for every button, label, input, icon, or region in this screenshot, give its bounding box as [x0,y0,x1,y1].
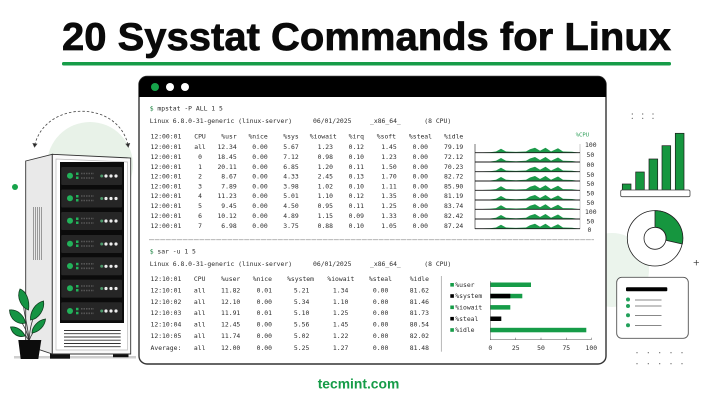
sar output table: 12:10:02 [151,298,181,306]
sar output table: 5.10 [294,309,309,317]
%CPU sparkline chart: 50 [586,180,594,188]
%CPU sparkline chart: 100 [585,141,597,149]
mpstat output table: 1.02 [318,182,333,190]
sar output table: 0.00 [257,344,272,352]
mpstat output table: 0.11 [349,202,364,210]
sar output table: Linux 6.8.0-31-generic (linux-server) [150,260,292,268]
title: 20 Sysstat Commands for Linux [62,16,671,59]
mpstat output table: 0.00 [252,192,268,200]
leaves [10,289,46,337]
sar output table: all [194,344,206,352]
mpstat output table: CPU [194,132,206,140]
mpstat output table: 12:00:01 [151,222,181,230]
server unit 2 [61,190,122,208]
mpstat output table: 0.12 [349,192,364,200]
%CPU sparkline chart: 00 [586,161,594,169]
horizontal bar chart [450,281,597,352]
server unit 4 [61,235,122,253]
sar output table: $ sar -u 1 5 [150,248,196,256]
mpstat output table: 0.00 [252,202,268,210]
sar output table: 0.00 [257,332,272,340]
sar output table: 1.10 [333,298,348,306]
sar output table: 0.00 [373,344,388,352]
mpstat output table: 12:00:01 [151,172,181,180]
sar output table: 5.25 [294,344,309,352]
mpstat output table: 72.12 [444,153,463,161]
window buttons [151,83,189,91]
sar output table: 81.46 [410,298,429,306]
%CPU sparkline chart: 50 [586,151,594,159]
sar output table: 82.02 [410,332,429,340]
mpstat output table: 0.12 [349,143,364,151]
sar output table: 1.22 [333,332,348,340]
panel: terminal window [139,76,606,364]
server front face [52,154,131,354]
mpstat output table: %usr [221,132,237,140]
server unit 1 [61,167,122,185]
mpstat output table: 0.00 [252,212,268,220]
mpstat output table: 0.95 [318,202,333,210]
sar output table: 0.00 [257,320,272,328]
mpstat output table: 3.75 [283,222,299,230]
mpstat output table: 4.50 [283,202,299,210]
server unit 6 [61,280,122,298]
legend labels: %steal [455,315,479,323]
sar output table: 1.34 [333,286,348,294]
icon: bar chart [621,133,690,197]
server unit 5 [61,257,122,275]
sar output table: 11.74 [221,332,240,340]
legend labels: %idle [455,326,475,334]
mpstat output table: 1.23 [381,153,397,161]
mpstat output table: %idle [444,132,463,140]
mpstat output table: 0 [198,153,202,161]
%CPU sparkline chart: 50 [586,199,594,207]
mpstat output table: 12:00:01 [151,192,181,200]
mpstat output table: _x86_64_ [370,117,401,125]
mpstat output table: 5 [198,202,202,210]
sar output table: 12.45 [221,320,240,328]
sar output table: _x86_64_ [370,260,401,268]
decorative dots bottom right [636,352,683,364]
axis: 50 [537,344,545,352]
mpstat output table: (8 CPU) [424,117,451,125]
sar output table: 12:10:05 [151,332,181,340]
legend labels: %user [455,281,475,289]
mpstat output table: 0.00 [413,222,428,230]
mpstat output table: 2.45 [318,172,333,180]
mpstat output table: 1.15 [318,212,333,220]
mpstat output table: 20.11 [217,163,237,171]
mpstat output table: 0.00 [413,182,428,190]
mpstat output table: 10.12 [217,212,237,220]
mpstat output table: 3 [198,182,202,190]
mpstat output table: %sys [283,132,299,140]
sar output table: 0.01 [257,309,272,317]
mpstat output table: 1.11 [381,182,397,190]
background blob: right side [575,233,649,307]
%CPU sparkline chart: 0 [588,226,592,234]
mpstat output table: 3.98 [283,182,299,190]
mpstat output table: 0.00 [252,222,268,230]
mpstat output table: 0.00 [252,143,268,151]
mpstat output table: 5.01 [283,192,299,200]
mpstat output table: 1.23 [318,143,333,151]
mpstat output table: 82.42 [444,212,463,220]
mpstat output table: 1.05 [381,222,397,230]
mpstat output table: %steal [409,132,432,140]
mpstat output table: 12:00:01 [151,163,181,171]
mpstat output table: 0.00 [252,172,268,180]
mpstat output table: %soft [377,132,396,140]
mpstat output table: 0.98 [318,153,333,161]
%CPU sparkline chart: 100 [585,208,597,216]
window title bar [139,76,606,97]
%CPU sparkline chart: 50 [586,218,594,226]
mpstat output table: 1.70 [381,172,397,180]
decorative plus [694,260,699,265]
axis: 100 [586,344,597,352]
mpstat output table: 1.50 [381,163,397,171]
axis [488,281,597,352]
mpstat output table: 0.00 [413,163,428,171]
sar output table: 0.00 [373,298,388,306]
mpstat output table: 4 [198,192,202,200]
pot [18,340,41,359]
sar output table [150,248,451,352]
sar output table: %system [287,275,314,283]
sar output table: 1.45 [333,320,348,328]
mpstat output table: 0.00 [413,153,428,161]
sar output table: 1.27 [333,344,348,352]
sar output table: 81.73 [410,309,429,317]
sar output table: CPU [194,275,206,283]
mpstat output table: %iowait [310,132,337,140]
section divider [149,239,594,241]
sar output table: 81.48 [410,344,429,352]
bars [490,282,586,332]
mpstat output table: 12.34 [217,143,237,151]
mpstat output table: 81.19 [444,192,463,200]
sar output table: all [194,320,206,328]
mpstat output table: 5.67 [283,143,299,151]
mpstat output table: 0.10 [349,222,364,230]
mpstat output table: 0.13 [349,172,364,180]
sar output table: all [194,286,206,294]
front inner frame [56,159,128,350]
sar output table: 12.00 [221,344,240,352]
mpstat output table: 1 [198,163,202,171]
sar output table: all [194,309,206,317]
title underline [62,62,671,66]
mpstat output table: 70.23 [444,163,463,171]
mpstat output table: 1.20 [318,163,333,171]
mpstat output table: %irq [349,132,364,140]
server rack illustration [14,154,136,359]
mpstat output table: 82.72 [444,172,463,180]
green dot [12,184,18,190]
sar output table: 5.02 [294,332,309,340]
sar output table: Average: [151,344,181,352]
server feet [50,353,128,359]
axis: 75 [562,344,570,352]
ground shadow [14,356,136,358]
%CPU sparkline chart: 50 [586,171,594,179]
sar output table: 5.34 [294,298,309,306]
mpstat output table: 1.33 [381,212,397,220]
mpstat output table: 7.89 [221,182,237,190]
server unit 3 [61,212,122,230]
mpstat output table: 0.00 [413,172,428,180]
mpstat output table: 0.88 [318,222,333,230]
plant [10,289,46,359]
decorative dots top right [632,113,654,119]
sar output table: %iowait [327,275,354,283]
sar output table: 0.00 [373,332,388,340]
mpstat output table: 6.98 [221,222,237,230]
server side face [26,154,52,354]
mpstat output table: 12:00:01 [151,153,181,161]
sar output table: 0.00 [373,309,388,317]
mpstat output table: 18.45 [217,153,237,161]
mpstat output table: 06/01/2025 [313,117,352,125]
mpstat output table: 2 [198,172,202,180]
mpstat output table: 9.45 [221,202,237,210]
sar output table: 5.21 [294,286,309,294]
mpstat output table: 12:00:01 [151,202,181,210]
mpstat output table: 85.90 [444,182,463,190]
mpstat output table: 0.00 [252,153,268,161]
sar output table: 0.00 [257,298,272,306]
sar output table: 06/01/2025 [313,260,352,268]
rack bay [60,162,124,323]
mpstat output table: 79.19 [444,143,463,151]
mpstat output table: $ mpstat -P ALL 1 5 [150,104,223,112]
sar output table: 0.00 [373,286,388,294]
sar output table: (8 CPU) [424,260,451,268]
mpstat output table: 4.33 [283,172,299,180]
mpstat output table: 0.10 [349,153,364,161]
front vents [64,330,121,347]
mpstat output table: 0.00 [413,202,428,210]
mpstat output table: 0.00 [413,192,428,200]
mpstat output table: 8.67 [221,172,237,180]
mpstat output table: 6.85 [283,163,299,171]
mpstat output table: 1.25 [381,202,397,210]
mpstat output table: 0.00 [252,163,268,171]
sar output table: 12:10:04 [151,320,181,328]
mpstat output table: 83.74 [444,202,463,210]
%CPU sparkline chart: 50 [586,190,594,198]
sar output table: 0.00 [373,320,388,328]
brand: tecmint.com: tecmint.com [318,376,399,392]
mpstat output table: 0.00 [252,182,268,190]
background blob: behind server [47,122,133,208]
sar output table: %idle [410,275,429,283]
sar output table: 0.01 [257,286,272,294]
mpstat output table: %nice [248,132,268,140]
mpstat output table: 1.45 [381,143,397,151]
sar output table: %user [221,275,240,283]
mpstat output table: 1.35 [381,192,397,200]
sar output table: %nice [253,275,272,283]
icon: dashed arc arrow [33,111,130,147]
mpstat output table: 12:00:01 [151,132,181,140]
mpstat output table: 1.10 [318,192,333,200]
sar output table: 11.91 [221,309,240,317]
mpstat output table: 87.24 [444,222,463,230]
sar output table: 5.56 [294,320,309,328]
sar output table: 12:10:01 [151,286,181,294]
mpstat output table: 12:00:01 [151,182,181,190]
window frame [139,76,606,364]
server unit 7 [61,302,122,320]
axis: 0 [488,344,492,352]
mpstat output table: 4.89 [283,212,299,220]
mpstat output table: 0.00 [413,143,428,151]
sar output table: all [194,332,206,340]
mpstat output table: 7.12 [283,153,299,161]
mpstat output table: 12:00:01 [151,212,181,220]
mpstat output table: 0.09 [349,212,364,220]
sar output table: 12:10:01 [151,275,181,283]
sar output table: 81.62 [410,286,429,294]
mpstat output table: 12:00:01 [151,143,181,151]
sar output table: 11.82 [221,286,240,294]
icon: list card [617,277,688,338]
sar output table: 12:10:03 [151,309,181,317]
mpstat output table: 11.23 [217,192,237,200]
sar output table: 1.25 [333,309,348,317]
icon: donut chart [627,211,683,266]
sar output table: 12.10 [221,298,240,306]
legend labels: %system [455,292,482,300]
side vents [34,207,42,260]
mpstat output table: 7 [198,222,202,230]
mpstat output table: all [194,143,206,151]
sar output table: %steal [369,275,392,283]
mpstat output table: 0.00 [413,212,428,220]
legend labels [450,281,482,334]
mpstat output table: 6 [198,212,202,220]
mpstat output table: 0.10 [349,182,364,190]
mpstat output table: Linux 6.8.0-31-generic (linux-server) [150,117,292,125]
sar output table: all [194,298,206,306]
axis: 25 [512,344,520,352]
%CPU sparkline chart [475,132,597,234]
mpstat output table: 0.11 [349,163,364,171]
%CPU sparkline chart: %CPU [576,132,589,138]
legend labels: %iowait [455,304,482,312]
vertical separator [440,276,442,352]
sar output table: 80.54 [410,320,429,328]
mpstat output table [150,104,463,230]
stems [17,305,39,341]
